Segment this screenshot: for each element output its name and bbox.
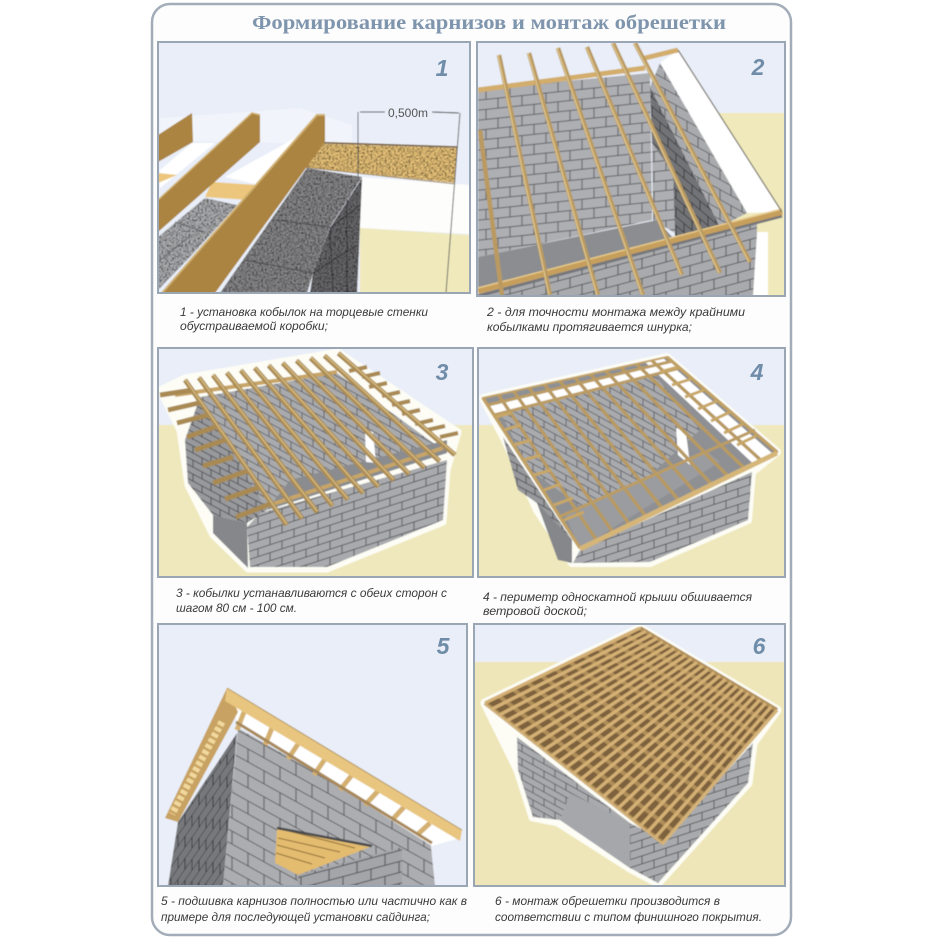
illustration 2 (477, 42, 785, 296)
roof deck (485, 628, 777, 843)
caption 3: 3 - кобылки устанавливаются с обеих сторон с (176, 586, 447, 600)
number 4: 4 (750, 359, 764, 385)
caption 5: примере для последующей установки сайдинга; (161, 910, 430, 924)
panel 3: rafters on both sides (158, 348, 473, 615)
panel border 4 (478, 348, 785, 577)
caption 4: ветровой доской; (483, 604, 587, 618)
caption 6 (495, 894, 762, 924)
dimension label: 0,500m (388, 106, 428, 120)
caption 2 (486, 305, 745, 334)
panel 2: string between end rafters (477, 42, 785, 334)
number 6: 6 (753, 633, 766, 659)
caption 1: 1 - установка кобылок на торцевые стенки (180, 305, 428, 319)
eave blocks (496, 367, 756, 520)
caption 1 (180, 305, 428, 333)
panel 6: battens (474, 624, 785, 924)
panel 4: wind board perimeter (478, 348, 785, 618)
caption 3: шагом 80 см - 100 см. (176, 601, 297, 615)
panel border 5 (158, 624, 467, 886)
caption 1: обустраиваемой коробки; (180, 319, 328, 333)
panel 1: rafter installation (158, 42, 470, 333)
caption 4: 4 - периметр односкатной крыши обшивается (483, 590, 753, 604)
illustration 5 (158, 624, 467, 886)
panel border 2 (477, 42, 785, 296)
caption 2: кобылками протягивается шнурка; (487, 320, 692, 334)
rafters (485, 628, 777, 843)
rafters (483, 357, 777, 548)
illustration 6 (474, 624, 785, 886)
walls (168, 733, 237, 886)
white gaps along eaves (488, 358, 773, 464)
opening (275, 828, 370, 875)
caption 5 (161, 894, 467, 924)
number 3: 3 (436, 359, 449, 385)
house (573, 472, 752, 563)
caption 6: соответствии с типом финишного покрытия. (495, 910, 762, 924)
panel border 6 (474, 624, 785, 886)
number 5: 5 (437, 633, 451, 659)
panel border 1 (158, 42, 470, 293)
wind board (483, 357, 777, 548)
caption 2: 2 - для точности монтажа между крайними (486, 305, 745, 319)
front board (225, 688, 462, 841)
caption 6: 6 - монтаж обрешетки производится в (495, 894, 720, 908)
soffit gaps and blocks (230, 702, 460, 846)
panel border 3 (158, 348, 473, 577)
outer frame (152, 4, 791, 935)
illustration 3 (158, 348, 473, 577)
number 1: 1 (436, 55, 448, 81)
house (200, 373, 447, 510)
caption 5: 5 - подшивка карнизов полностью или частично как в (161, 894, 467, 908)
house (516, 737, 630, 823)
roof deck (483, 357, 777, 548)
caption 3 (176, 586, 447, 615)
caption 4 (483, 590, 753, 618)
illustration 4 (478, 348, 785, 577)
left eave (165, 688, 238, 822)
number 2: 2 (751, 54, 765, 80)
illustration 1 (158, 42, 470, 293)
panel 5: eaves soffit (158, 624, 467, 924)
title: Формирование карнизов и монтаж обрешетки (252, 12, 726, 34)
battens (485, 628, 777, 843)
